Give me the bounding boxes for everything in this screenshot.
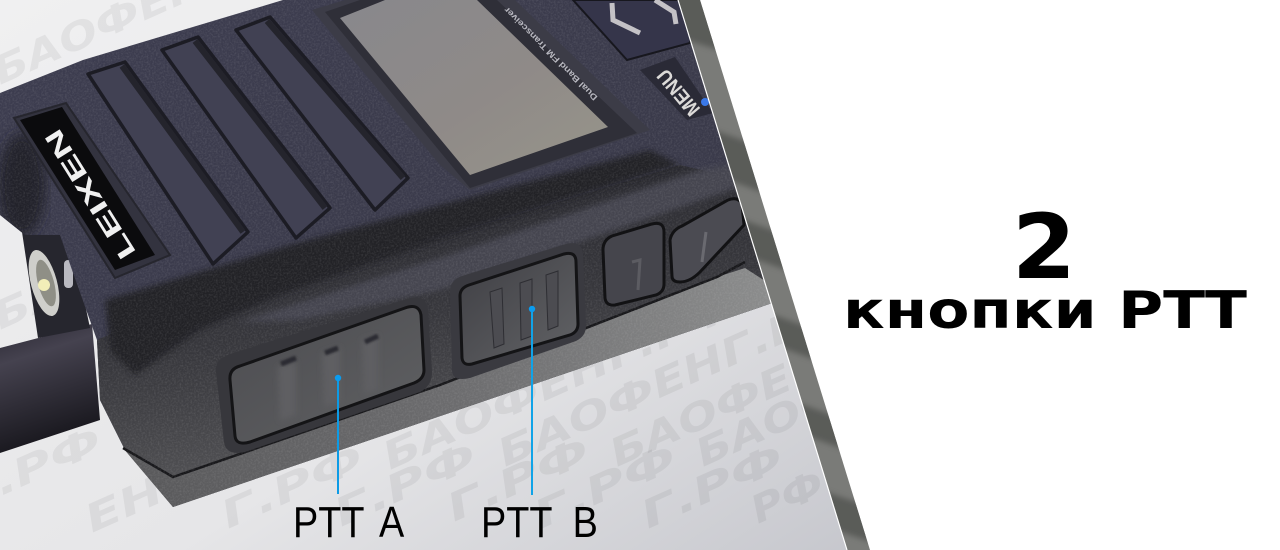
callout: PTT A (293, 375, 405, 547)
callout: PTT A: PTT A (293, 497, 405, 547)
body upper face (0, 0, 790, 507)
brand badge (14, 103, 170, 278)
dark ridge (105, 150, 680, 375)
product photo panel (0, 0, 880, 550)
screen bezel (312, 0, 650, 190)
PTT A button (216, 297, 432, 453)
callout: PTT B: PTT B (481, 497, 598, 547)
watermark text: РФ (744, 461, 831, 532)
grille ribs (88, 17, 408, 264)
seam line (123, 262, 745, 477)
watermark text: БАОФЕ (689, 358, 880, 475)
brand badge: LEIXEN (40, 124, 142, 264)
watermark text: БАОФЕНГ.РФ (491, 280, 856, 475)
radio body (0, 0, 771, 507)
watermark text (0, 0, 880, 541)
LCD screen (340, 0, 608, 175)
screen inner frame (325, 0, 637, 188)
heading number: 2 (1012, 195, 1076, 299)
chrome knob (22, 232, 90, 338)
bottom strip (123, 268, 790, 507)
body texture (0, 0, 766, 506)
bezel caption: Dual Band FM Transceiver (501, 4, 599, 103)
small side button 2 (670, 199, 744, 282)
watermark text: Г.РФ (634, 435, 791, 537)
watermark text: ЕНГ.РФ (78, 408, 304, 541)
arrow key (573, 0, 700, 60)
watermark text: Г.РФ (214, 435, 371, 537)
watermark text: БАОФЕНГ (603, 326, 866, 475)
light ridge (240, 162, 745, 322)
PTT B button (450, 243, 586, 379)
watermark text: Г.РФ (527, 435, 684, 537)
heading text: кнопки РТТ (843, 281, 1248, 341)
watermark text: БАОФЕНГ.РФ (376, 283, 741, 478)
watermark text: Г.РФ (440, 428, 597, 530)
callout: PTT B (481, 306, 598, 547)
blurred knob shadow (0, 133, 46, 237)
MENU key: MENU (653, 64, 705, 120)
antenna (0, 324, 100, 453)
white edge line (678, 0, 847, 550)
small side button 1 (603, 223, 664, 305)
watermark text: Г.РФ (327, 433, 484, 535)
diagonal grey divider band (670, 0, 880, 550)
blue LED (701, 98, 709, 106)
photo backdrop (0, 0, 860, 550)
body side face (97, 165, 790, 507)
